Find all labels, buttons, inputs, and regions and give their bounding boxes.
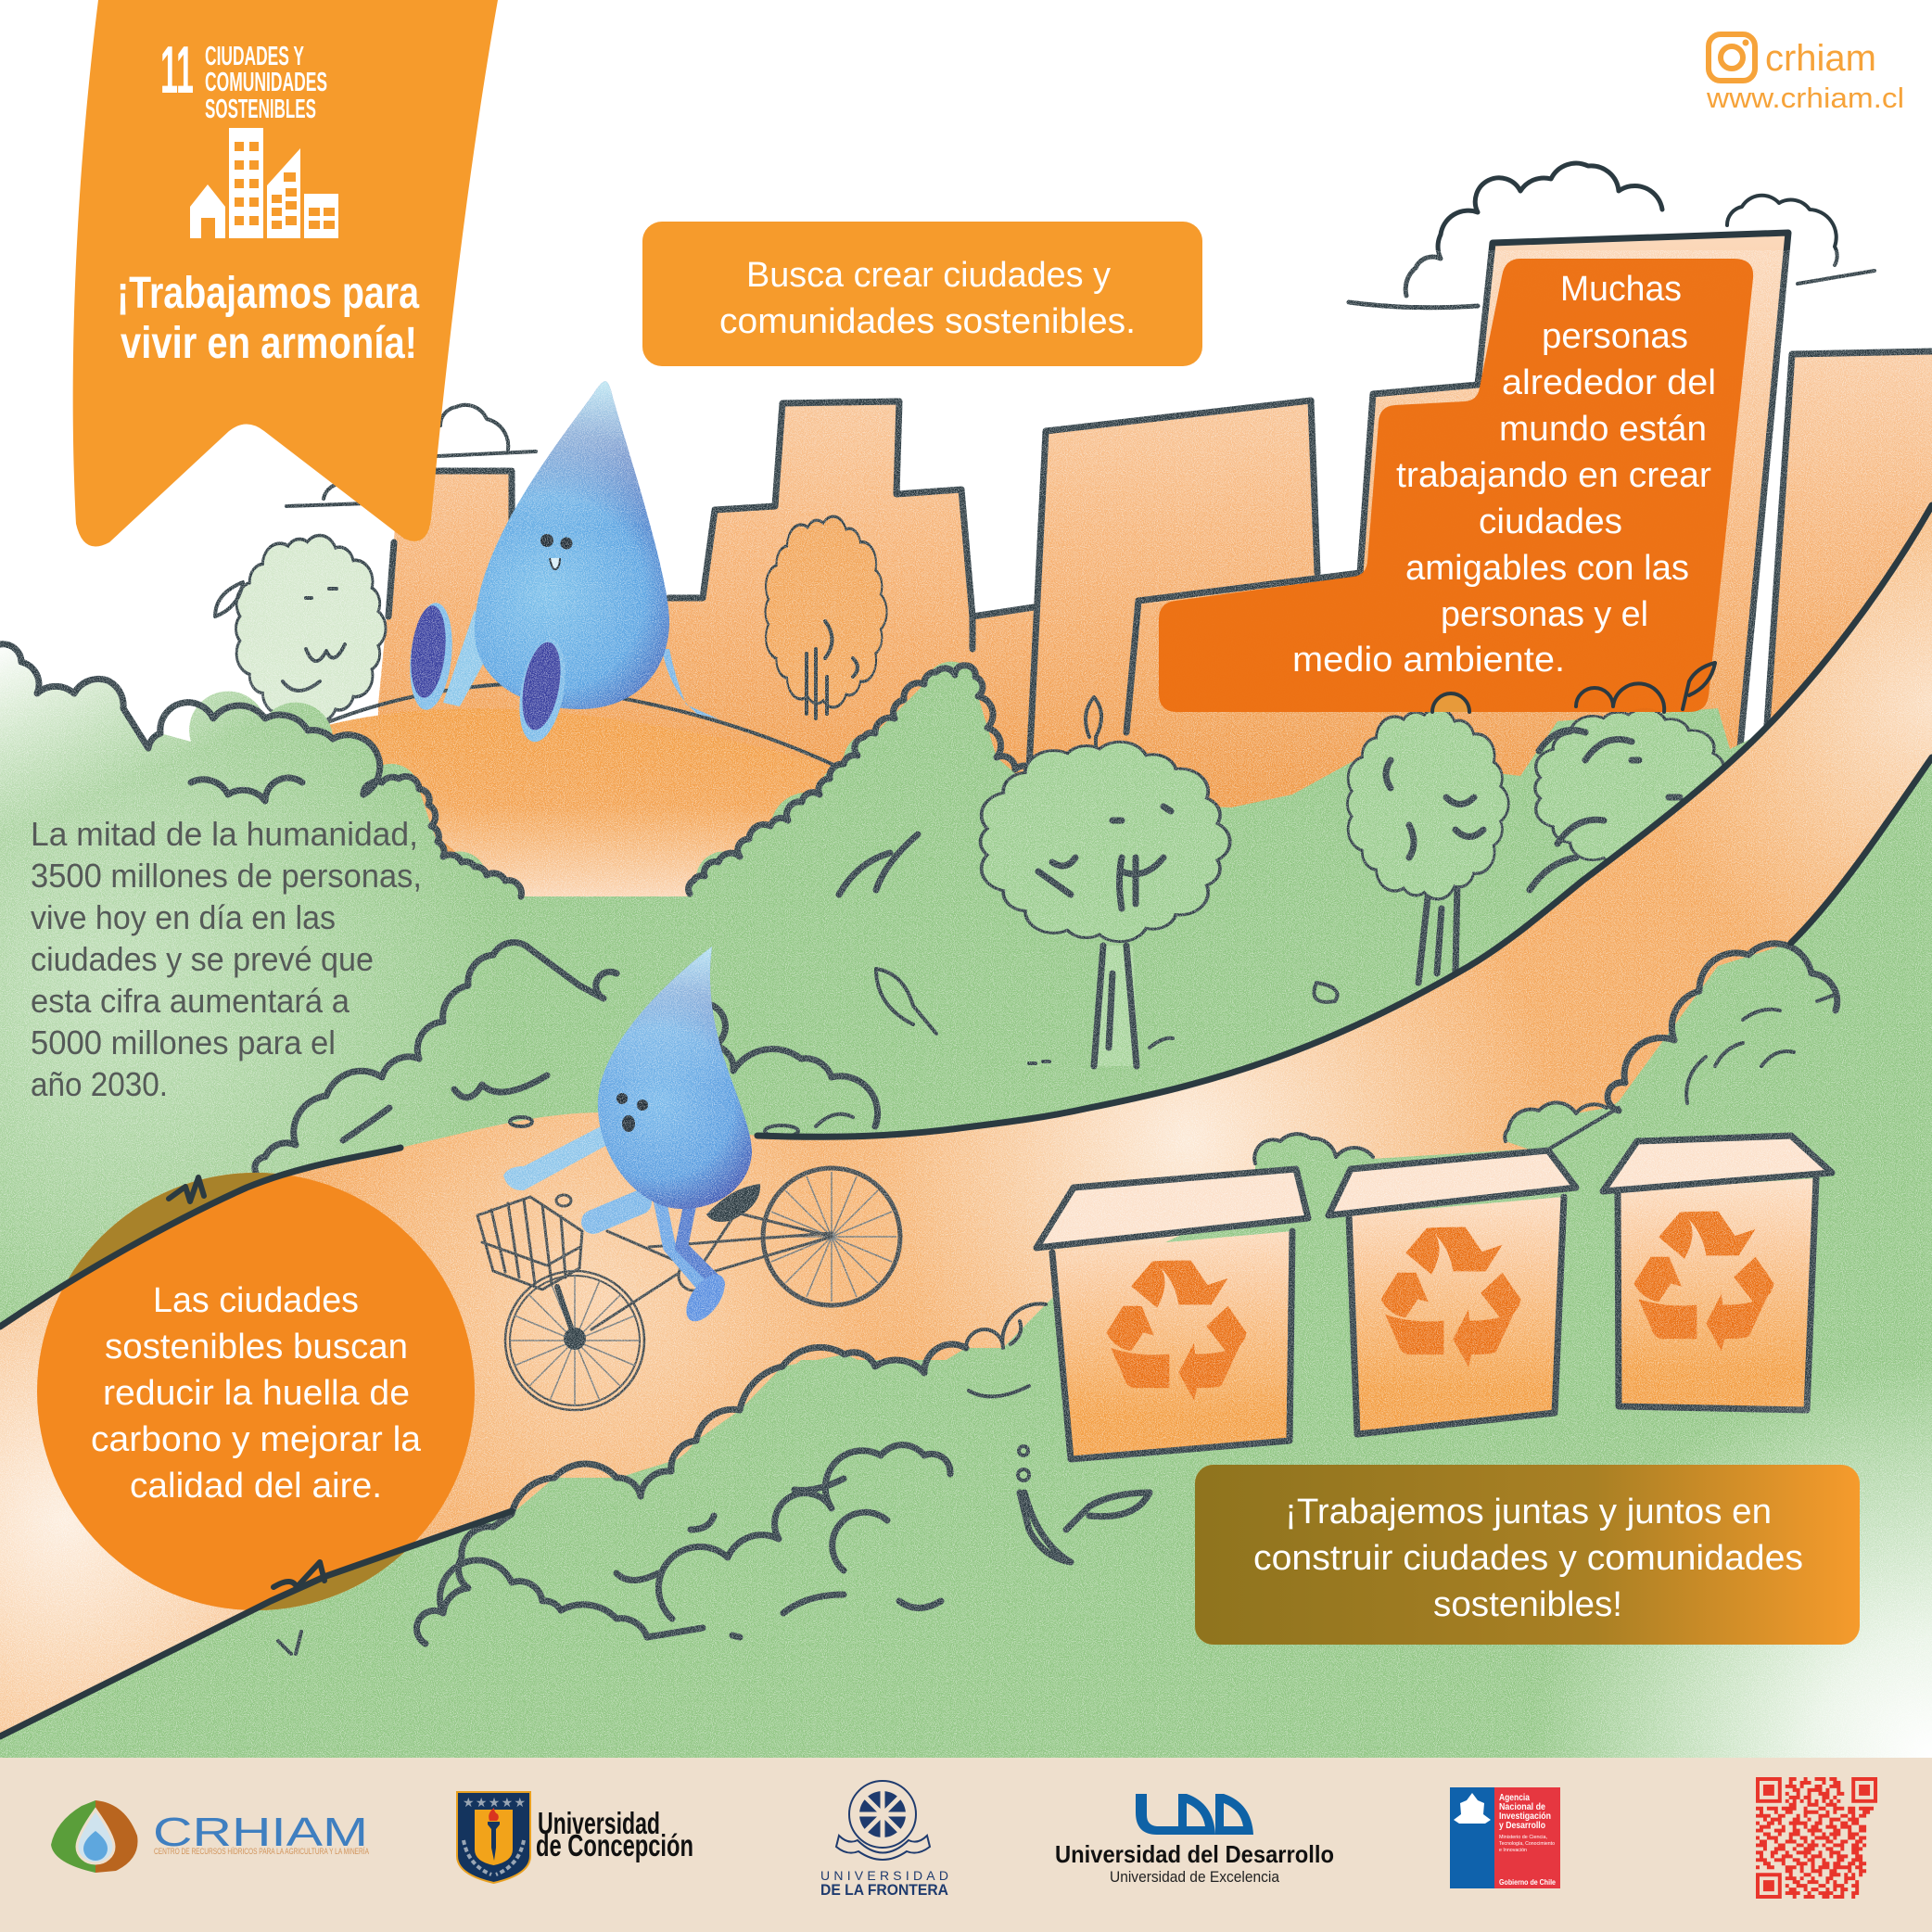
tree: big tree	[982, 744, 1228, 1066]
SDG number and name: 11	[160, 33, 194, 108]
tree: pale left tree	[237, 537, 385, 732]
box: building-shaped message: personas y el	[1441, 595, 1648, 634]
logo: Universidad de Concepción: de Concepción	[536, 1828, 693, 1862]
box: building-shaped message: personas	[1542, 317, 1688, 356]
banner headline	[117, 269, 419, 368]
box: building-shaped message: ciudades	[1479, 502, 1622, 541]
banner headline: ¡Trabajamos para	[117, 269, 419, 318]
box: building-shaped message: amigables con las	[1405, 549, 1689, 588]
footer band	[0, 1758, 1932, 1932]
box: building-shaped message: medio ambiente.	[1292, 641, 1565, 680]
logo: ANID: Tecnología, Conocimiento	[1499, 1841, 1555, 1847]
circle: carbon footprint message	[0, 1148, 512, 1736]
road edge lines right	[757, 505, 1932, 1137]
text: humanity statistic: vive hoy en día en las	[31, 898, 336, 936]
trash bin 2	[1328, 1150, 1576, 1434]
leaves	[215, 582, 1715, 1562]
logo: CRHIAM	[51, 1800, 369, 1873]
bicycle basket	[477, 1195, 582, 1290]
logo: Universidad de La Frontera	[820, 1781, 948, 1899]
box: building-shaped message	[1159, 259, 1753, 712]
recycle symbol 3	[1634, 1212, 1773, 1351]
green field	[0, 593, 1932, 1758]
text: humanity statistic	[31, 815, 422, 1103]
box: orange message top centre: Busca crear ciudades y	[746, 256, 1111, 295]
logo: ANID: Gobierno de Chile	[1499, 1878, 1556, 1887]
text: humanity statistic: 5000 millones para el	[31, 1023, 336, 1061]
logo: Universidad de La Frontera: DE LA FRONTERA	[820, 1881, 948, 1899]
tree tops over message box	[1432, 663, 1715, 712]
SDG number and name: SOSTENIBLES	[205, 95, 316, 124]
bushes behind right tree	[1530, 710, 1730, 890]
logo: Universidad de Concepción	[457, 1792, 693, 1883]
lower bush	[416, 1303, 1057, 1669]
logo: Universidad de La Frontera: UNIVERSIDAD	[820, 1868, 948, 1883]
clouds	[286, 163, 1875, 506]
text: humanity statistic: 3500 millones de personas,	[31, 857, 422, 895]
logo: Universidad de Concepción: Universidad	[538, 1806, 660, 1840]
box: orange message top centre	[642, 222, 1202, 366]
logo: CRHIAM: CENTRO DE RECURSOS HÍDRICOS PARA LA AGRICULTURA Y LA MINERÍA	[154, 1847, 369, 1856]
text: humanity statistic: año 2030.	[31, 1065, 168, 1103]
road	[0, 505, 1932, 1736]
circle: carbon footprint message: sostenibles buscan	[105, 1328, 408, 1366]
box: call to action	[1195, 1465, 1860, 1645]
right bush and small bushes by the bins	[1254, 944, 1837, 1298]
water drop character sitting	[405, 381, 719, 745]
SDG number and name	[160, 33, 327, 124]
bicycle	[477, 1168, 900, 1410]
logo: ANID: Nacional de	[1499, 1801, 1545, 1812]
box: building-shaped message: mundo están	[1499, 410, 1707, 449]
logo: Universidad de Concepción: ★★★★★	[463, 1795, 526, 1810]
logo: ANID: Investigación	[1499, 1811, 1551, 1822]
logo: ANID: Agencia	[1499, 1792, 1530, 1803]
banner headline: vivir en armonía!	[121, 319, 417, 368]
city buildings	[378, 233, 1932, 927]
logo: Universidad del Desarrollo: Universidad de Excelencia	[1110, 1868, 1279, 1886]
text: humanity statistic: ciudades y se prevé que	[31, 940, 374, 978]
QR code	[1756, 1777, 1877, 1899]
logo: ANID: Ministerio de Ciencia,	[1499, 1835, 1547, 1840]
tree: right tree	[1349, 710, 1507, 983]
recycle symbol 1	[1107, 1261, 1246, 1400]
social handle: crhiam	[1765, 38, 1876, 79]
logo: Universidad del Desarrollo	[1055, 1794, 1334, 1886]
box: call to action: sostenibles!	[1433, 1585, 1622, 1624]
social handle: www.crhiam.cl	[1706, 82, 1904, 114]
circle: carbon footprint message: carbono y mejorar la	[91, 1420, 422, 1459]
text: humanity statistic: La mitad de la humanidad,	[31, 815, 418, 853]
SDG number and name: CIUDADES Y	[205, 42, 304, 71]
logo: CRHIAM: CRHIAM	[153, 1810, 368, 1855]
text: humanity statistic: esta cifra aumentará a	[31, 982, 350, 1020]
box: building-shaped message: trabajando en crear	[1396, 456, 1711, 495]
water drop character on bicycle	[503, 947, 752, 1328]
bush behind cyclist	[255, 943, 878, 1654]
social handle	[1706, 34, 1904, 114]
trash bin 3	[1603, 1136, 1832, 1410]
box: building-shaped message: alrededor del	[1502, 363, 1716, 402]
box: building-shaped message: Muchas	[1560, 270, 1682, 309]
banner: SDG 11 ribbon	[73, 0, 498, 547]
grain texture	[0, 250, 1932, 1758]
box: orange message top centre: comunidades sostenibles.	[719, 302, 1136, 341]
logo: ANID	[1450, 1787, 1560, 1888]
bottom right fade	[1391, 1205, 1932, 1758]
tree: outlined tree on building	[767, 518, 886, 718]
logo: Universidad del Desarrollo: Universidad del Desarrollo	[1055, 1840, 1334, 1868]
circle: carbon footprint message: Las ciudades	[153, 1281, 359, 1320]
recycle symbol 2	[1381, 1227, 1520, 1366]
logo: ANID: e Innovación	[1499, 1848, 1527, 1853]
hill	[308, 684, 844, 904]
circle: carbon footprint message: reducir la huella de	[103, 1374, 410, 1413]
SDG number and name: COMUNIDADES	[205, 68, 327, 97]
trash bin 1	[1036, 1169, 1308, 1459]
box: call to action: construir ciudades y comunidades	[1253, 1539, 1803, 1578]
box: call to action: ¡Trabajemos juntas y juntos en	[1285, 1493, 1772, 1532]
logo: ANID: y Desarrollo	[1499, 1820, 1545, 1831]
circle: carbon footprint message: calidad del aire.	[130, 1467, 382, 1506]
icon: instagram	[1709, 34, 1755, 81]
icon: city buildings	[190, 128, 338, 238]
